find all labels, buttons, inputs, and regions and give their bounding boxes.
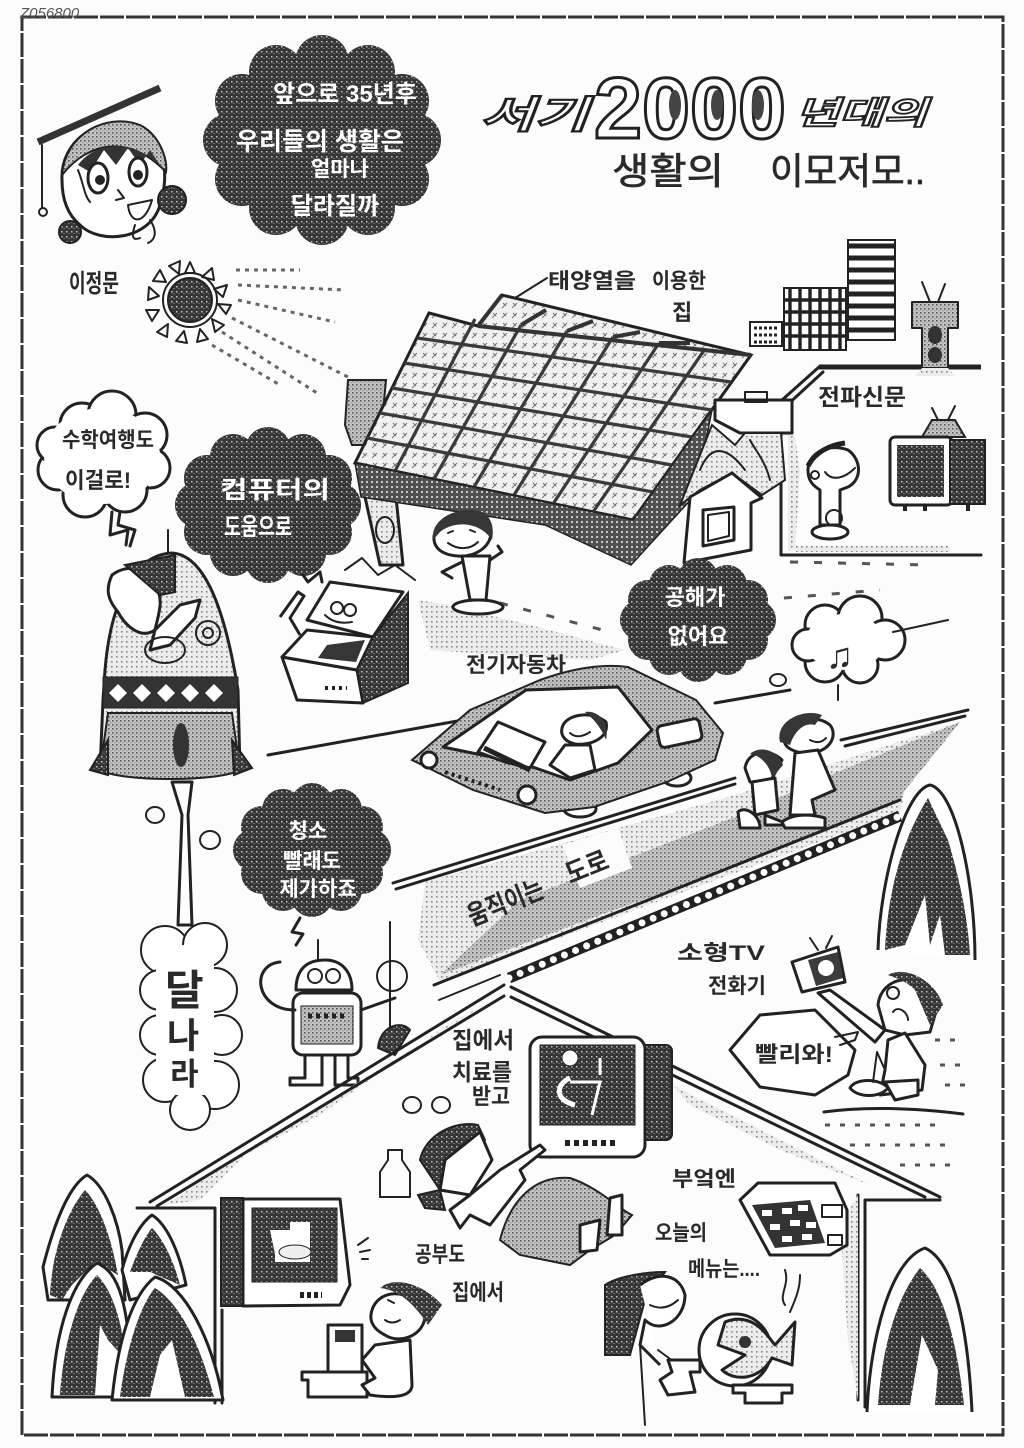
icon: small tv phone bbox=[792, 936, 845, 992]
moving road: 움직이는 bbox=[463, 874, 548, 932]
moon label cloud: 나 bbox=[167, 1017, 199, 1056]
small house bbox=[684, 473, 762, 563]
house: newspaper room bbox=[745, 367, 985, 555]
ground dashes bbox=[500, 562, 930, 632]
moving road bbox=[393, 690, 968, 1000]
label: today's menu: 오늘의 bbox=[655, 1222, 707, 1245]
kitchen screen bbox=[655, 1168, 847, 1281]
label: today's menu bbox=[655, 1222, 760, 1281]
small house behind bbox=[715, 400, 792, 433]
label: today's menu: 메뉴는.... bbox=[688, 1258, 760, 1281]
electric car bbox=[412, 666, 723, 817]
music thought bubble: ♫ bbox=[826, 635, 853, 676]
label: solar house: 이용한 bbox=[652, 270, 706, 293]
title: 생활의 bbox=[612, 151, 724, 192]
fish globe cooker bbox=[699, 1270, 800, 1403]
tree: bottom right bbox=[867, 1248, 972, 1412]
speech bubble: school trip bbox=[37, 391, 170, 546]
robot bbox=[261, 922, 410, 1085]
label: study at home bbox=[415, 1242, 504, 1305]
study tv bbox=[221, 1198, 370, 1306]
rocket bbox=[90, 530, 252, 1130]
moving road: 도로 bbox=[561, 845, 613, 890]
label: study at home: 집에서 bbox=[452, 1280, 504, 1305]
characters: walking children bbox=[738, 713, 835, 828]
bubble: how much will life change: 달라질까 bbox=[291, 193, 379, 220]
roof edge band bbox=[355, 410, 712, 565]
moon label cloud: 달 bbox=[165, 967, 204, 1014]
character: boy reading bbox=[808, 443, 858, 539]
tree: right bbox=[878, 785, 975, 960]
bubble: robot cleans: 청소 bbox=[289, 820, 327, 843]
woman cooking bbox=[605, 1272, 700, 1425]
title: 이모저모.. bbox=[770, 151, 925, 192]
speech bubble: school trip: 수학여행도 bbox=[62, 429, 154, 452]
bubble: how much will life change bbox=[203, 35, 441, 245]
patient lying in bed bbox=[380, 1097, 632, 1265]
label: tv phone: 전화기 bbox=[708, 975, 766, 998]
speech bubble: hurry bbox=[730, 1010, 858, 1095]
label: treatment at home: 치료를 bbox=[452, 1059, 512, 1085]
bubble: with computer help: 컴퓨터의 bbox=[220, 477, 330, 504]
bubble: robot cleans bbox=[233, 783, 391, 945]
bubble: no pollution bbox=[620, 558, 776, 682]
tv phone boy bbox=[677, 936, 970, 1165]
bubble: how much will life change: 우리들의 생활은 bbox=[236, 128, 404, 156]
large medical tv bbox=[530, 1037, 672, 1157]
label: electronic newspaper: 전파신문 bbox=[818, 384, 906, 410]
solar panel house bbox=[345, 270, 792, 580]
moon label cloud: 라 bbox=[170, 1057, 199, 1092]
speech bubble: hurry: 빨리와! bbox=[755, 1042, 833, 1067]
tall child bbox=[779, 713, 835, 828]
bubble: no pollution: 공해가 bbox=[665, 585, 725, 610]
title: 서기 bbox=[480, 95, 594, 137]
small child bbox=[738, 750, 790, 828]
bubble: no pollution: 없어요 bbox=[668, 624, 728, 649]
archive number: Z056800 bbox=[19, 5, 80, 22]
label: electric car: 전기자동차 bbox=[466, 654, 566, 677]
music thought bubble bbox=[770, 596, 948, 700]
title bbox=[480, 61, 932, 192]
exhaust bbox=[172, 782, 192, 925]
rail rollers bbox=[509, 816, 900, 978]
title: 2000 bbox=[594, 61, 786, 157]
road edge bbox=[268, 720, 463, 755]
studying child bbox=[302, 1282, 442, 1397]
bubble: with computer help bbox=[175, 427, 361, 583]
support legs bbox=[345, 497, 415, 580]
computer robot machine bbox=[280, 582, 408, 703]
label: solar house: 태양열을 bbox=[548, 270, 636, 293]
bubble: robot cleans: 제가하죠 bbox=[279, 878, 357, 901]
astronaut bbox=[108, 568, 160, 633]
ground shading bbox=[418, 600, 625, 660]
solar panels bbox=[355, 295, 751, 520]
bubble: with computer help: 도움으로 bbox=[224, 514, 292, 541]
icon: television bbox=[890, 406, 985, 511]
tank bbox=[345, 380, 386, 445]
character: girl with graduation cap bbox=[38, 88, 186, 243]
label: treatment at home: 집에서 bbox=[452, 1027, 514, 1053]
label: solar house bbox=[515, 270, 706, 325]
bubble: how much will life change: 얼마나 bbox=[311, 158, 369, 181]
moon label cloud bbox=[140, 923, 242, 1130]
label: treatment at home bbox=[452, 1027, 514, 1109]
diamond band bbox=[103, 677, 238, 708]
author name: 이정문 bbox=[69, 270, 119, 298]
trees: bottom left bbox=[43, 1175, 223, 1400]
icon: sun with rays bbox=[146, 261, 350, 395]
title: 년대의 bbox=[795, 95, 932, 131]
speech bubble: school trip: 이걸로! bbox=[65, 468, 131, 493]
bubble: how much will life change: 앞으로 35년후 bbox=[273, 81, 417, 108]
character: boy under house bbox=[433, 510, 503, 614]
tv phone boy: 소형TV bbox=[677, 942, 765, 965]
gable shading bbox=[680, 425, 785, 505]
label: treatment at home: 받고 bbox=[472, 1084, 510, 1109]
city skyline bbox=[750, 240, 958, 368]
house roof bottom bbox=[137, 985, 940, 1407]
label: study at home: 공부도 bbox=[415, 1242, 465, 1267]
bubble: robot cleans: 빨래도 bbox=[283, 850, 341, 873]
kitchen screen: 부엌엔 bbox=[672, 1168, 736, 1191]
label: solar house: 집 bbox=[672, 300, 692, 325]
